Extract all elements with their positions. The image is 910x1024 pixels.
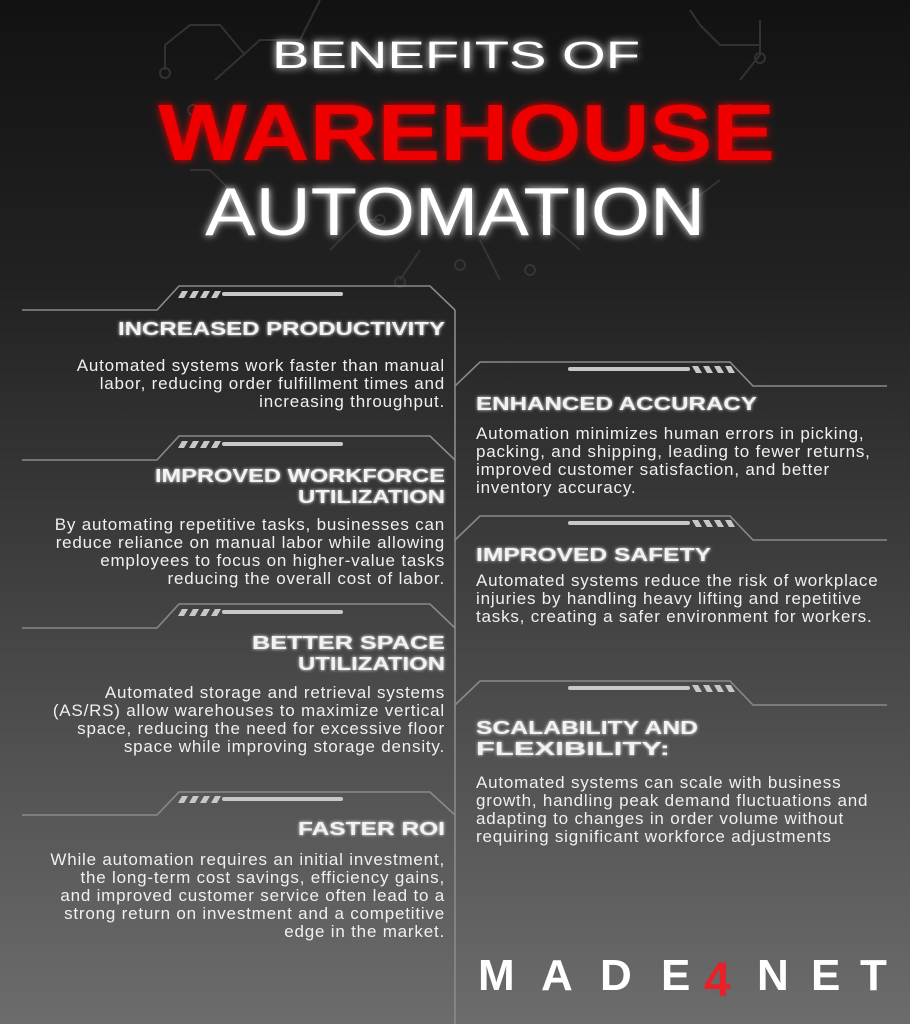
panel: improved workforce utilization: UTILIZATION bbox=[298, 487, 445, 507]
panel: scalability and flexibility: Automated systems can scale with business bbox=[476, 773, 841, 792]
panel: improved workforce utilization bbox=[22, 436, 455, 588]
panel: increased productivity bbox=[22, 286, 455, 411]
panel: faster roi: FASTER ROI bbox=[298, 819, 445, 839]
panel: scalability and flexibility bbox=[455, 681, 887, 846]
panel: enhanced accuracy: inventory accuracy. bbox=[476, 478, 636, 497]
panel: scalability and flexibility: adapting to changes in order volume without bbox=[476, 809, 844, 828]
logo: made4net: M bbox=[478, 951, 515, 1000]
panel: better space utilization: UTILIZATION bbox=[298, 654, 445, 674]
logo: made4net: N bbox=[757, 951, 789, 1000]
panel: enhanced accuracy: ENHANCED ACCURACY bbox=[476, 394, 757, 414]
panel: faster roi: the long-term cost savings, efficiency gains, bbox=[80, 868, 445, 887]
panel: improved workforce utilization: employees to focus on higher-value tasks bbox=[100, 551, 445, 570]
panel: faster roi: strong return on investment and a competitive bbox=[64, 904, 445, 923]
panel: scalability and flexibility: FLEXIBILITY: bbox=[476, 739, 670, 759]
panel: improved workforce utilization: reducing the overall cost of labor. bbox=[168, 569, 445, 588]
panel: improved workforce utilization: By automating repetitive tasks, businesses can bbox=[55, 515, 445, 534]
panel: scalability and flexibility: requiring significant workforce adjustments bbox=[476, 827, 832, 846]
panel: better space utilization: space while improving storage density. bbox=[124, 737, 445, 756]
panel: scalability and flexibility: SCALABILITY AND bbox=[476, 718, 698, 738]
panel: faster roi bbox=[22, 792, 455, 941]
title bbox=[158, 35, 775, 250]
logo: made4net: E bbox=[661, 951, 690, 1000]
panel: improved safety bbox=[455, 516, 887, 626]
logo: made4net bbox=[478, 951, 887, 1007]
panel: better space utilization: (AS/RS) allow warehouses to maximize vertical bbox=[53, 701, 445, 720]
logo: made4net: T bbox=[860, 951, 887, 1000]
panel: better space utilization: BETTER SPACE bbox=[252, 633, 445, 653]
panel: faster roi: and improved customer service often lead to a bbox=[60, 886, 445, 905]
title: WAREHOUSE bbox=[158, 88, 775, 177]
panel: faster roi: While automation requires an initial investment, bbox=[50, 850, 445, 869]
panel: scalability and flexibility: growth, handling peak demand fluctuations and bbox=[476, 791, 868, 810]
panel: increased productivity: labor, reducing order fulfillment times and bbox=[100, 374, 445, 393]
panel: improved safety: injuries by handling heavy lifting and repetitive bbox=[476, 589, 862, 608]
panel: better space utilization: Automated storage and retrieval systems bbox=[105, 683, 445, 702]
panel: enhanced accuracy: packing, and shipping, leading to fewer returns, bbox=[476, 442, 871, 461]
logo: made4net: E bbox=[811, 951, 840, 1000]
title: AUTOMATION bbox=[205, 174, 705, 250]
logo: made4net: 4 bbox=[704, 954, 731, 1007]
panel: improved workforce utilization: reduce reliance on manual labor while allowing bbox=[56, 533, 445, 552]
panel: improved safety: IMPROVED SAFETY bbox=[476, 545, 711, 565]
center divider line bbox=[454, 310, 456, 1024]
panel: enhanced accuracy: improved customer satisfaction, and better bbox=[476, 460, 830, 479]
panel: increased productivity: INCREASED PRODUCTIVITY bbox=[118, 319, 445, 339]
panel: better space utilization: space, reducing the need for excessive floor bbox=[77, 719, 445, 738]
logo: made4net: A bbox=[541, 951, 573, 1000]
panel: faster roi: edge in the market. bbox=[284, 922, 445, 941]
panel: improved safety: tasks, creating a safer environment for workers. bbox=[476, 607, 872, 626]
logo: made4net: D bbox=[600, 951, 632, 1000]
panel: increased productivity: Automated systems work faster than manual bbox=[77, 356, 445, 375]
panel: increased productivity: increasing throughput. bbox=[259, 392, 445, 411]
panel: improved safety: Automated systems reduce the risk of workplace bbox=[476, 571, 878, 590]
title: BENEFITS OF bbox=[272, 35, 640, 77]
panel: better space utilization bbox=[22, 604, 455, 756]
panel: enhanced accuracy: Automation minimizes human errors in picking, bbox=[476, 424, 864, 443]
panel: improved workforce utilization: IMPROVED WORKFORCE bbox=[155, 466, 445, 486]
panel: enhanced accuracy bbox=[455, 362, 887, 497]
